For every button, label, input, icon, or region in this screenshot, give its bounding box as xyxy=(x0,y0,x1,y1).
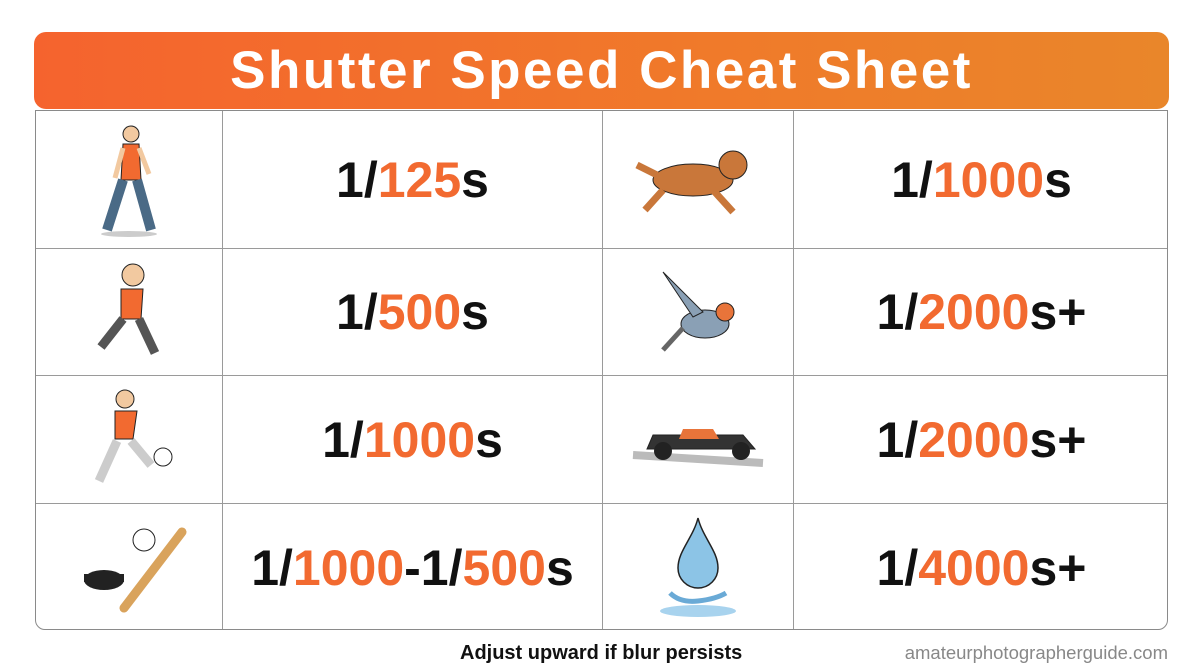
value 1/1000s: 1/1000s xyxy=(322,412,503,468)
value 1/2000s+ xyxy=(794,376,1169,504)
icon: running child xyxy=(36,249,223,376)
value 1/1000s xyxy=(794,111,1169,249)
value 1/125s xyxy=(223,111,603,249)
value 1/2000s+: 1/2000s+ xyxy=(877,284,1086,340)
value 1/2000s+ xyxy=(794,249,1169,376)
value 1/1000s: 1/1000s xyxy=(891,152,1072,208)
value 1/1000-1/500s: 1/1000-1/500s xyxy=(251,540,574,596)
table xyxy=(35,110,1168,630)
value 1/1000s xyxy=(223,376,603,504)
website credit: amateurphotographerguide.com xyxy=(905,642,1168,663)
value 1/4000s+: 1/4000s+ xyxy=(877,540,1086,596)
value 1/125s: 1/125s xyxy=(336,152,489,208)
icon: dog xyxy=(603,111,794,249)
value 1/500s: 1/500s xyxy=(336,284,489,340)
title xyxy=(34,32,1169,109)
icon: race car xyxy=(603,376,794,504)
icon: puck and bat xyxy=(36,504,223,631)
value 1/500s xyxy=(223,249,603,376)
value 1/1000-1/500s xyxy=(223,504,603,631)
icon: water drop xyxy=(603,504,794,631)
icon: walking person xyxy=(36,111,223,249)
icon: bird xyxy=(603,249,794,376)
footer note: Adjust upward if blur persists xyxy=(460,642,742,664)
value 1/2000s+: 1/2000s+ xyxy=(877,412,1086,468)
title: Shutter Speed Cheat Sheet xyxy=(230,41,973,100)
icon: soccer player xyxy=(36,376,223,504)
